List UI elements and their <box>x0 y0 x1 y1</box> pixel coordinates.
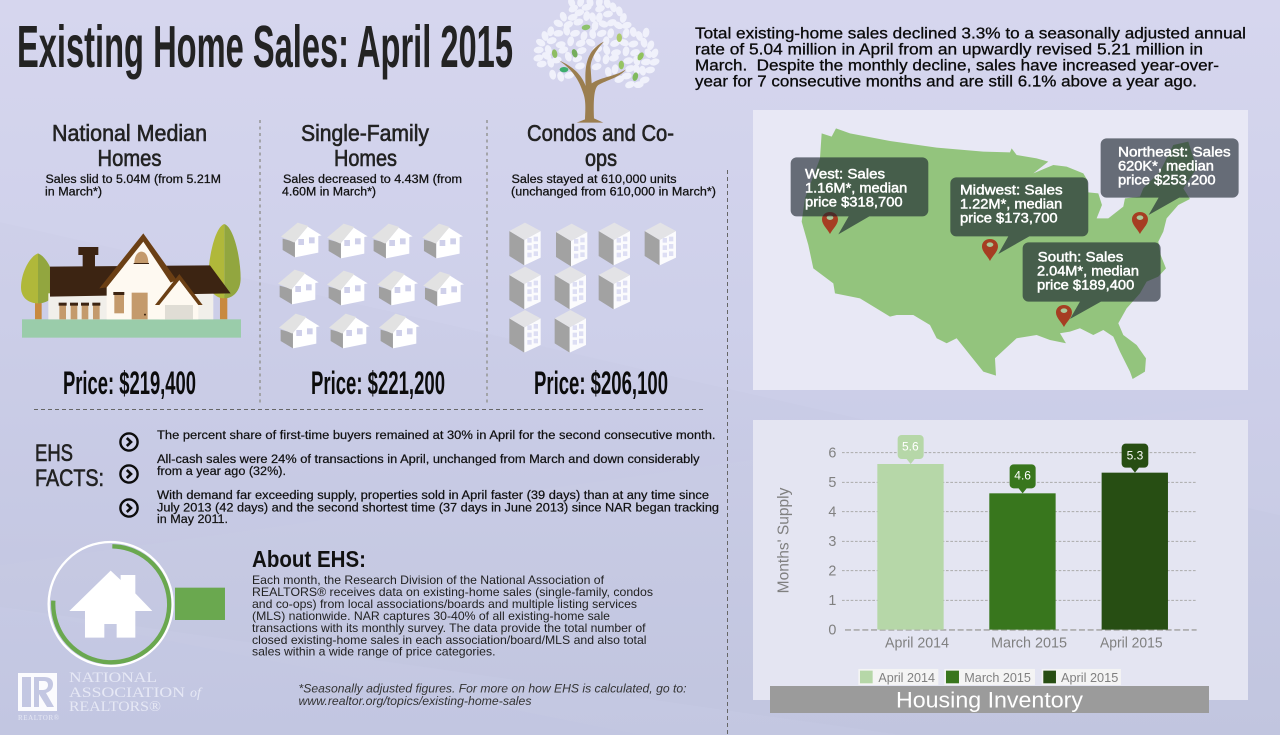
panel: housing inventory chart <box>753 420 1248 713</box>
bar: April 2014 <box>877 464 944 630</box>
intro paragraph: rate of 5.04 million in April from an upwardly revised 5.21 million in <box>695 42 1203 58</box>
icon: house illustration <box>21 224 241 338</box>
footnote <box>298 682 686 708</box>
panel: EHS facts <box>35 430 719 526</box>
pin: south <box>1056 305 1072 327</box>
icon: tree <box>533 0 660 123</box>
intro paragraph: March. Despite the monthly decline, sales have increased year-over- <box>695 58 1219 74</box>
icon: arrow bullet 2 <box>120 465 138 483</box>
callout: west <box>791 157 928 234</box>
title: Existing Home Sales: April 2015 <box>17 14 513 80</box>
x axis labels <box>885 636 1163 652</box>
label: 5.6 <box>898 435 924 464</box>
text: national sales: in March*) <box>45 186 102 198</box>
heading: condos and co-ops: Condos and Co- <box>527 120 674 146</box>
intro paragraph: year for 7 consecutive months and are still 6.1% above a year ago. <box>695 74 1197 90</box>
fact: demand and supply: With demand far exceeding supply, properties sold in April faster (39 days) than at any time since <box>157 490 709 502</box>
label: 4.6: 4.6 <box>1014 469 1031 483</box>
text: about EHS <box>252 574 653 658</box>
y axis labels: 3 <box>828 534 836 550</box>
heading: single-family homes: Single-Family <box>301 120 429 146</box>
chart title bar: housing inventory: Housing Inventory <box>896 688 1083 712</box>
text: single-family sales: 4.60M in March*) <box>282 186 376 198</box>
chart title bar: housing inventory <box>770 686 1209 713</box>
panel: national median homes <box>21 120 241 401</box>
bar: March 2015 <box>989 493 1056 630</box>
y axis labels: 2 <box>828 564 836 580</box>
heading: national median homes: National Median <box>52 120 207 146</box>
legend <box>858 669 1121 685</box>
heading: national median homes <box>52 120 207 171</box>
pin: west <box>822 212 838 234</box>
callout: west: West: Sales <box>805 166 885 181</box>
fact: all-cash sales: from a year ago (32%). <box>157 466 286 478</box>
callout: south: price $189,400 <box>1037 278 1135 293</box>
price: national: Price: $219,400 <box>63 365 196 401</box>
callout: midwest: price $173,700 <box>960 210 1058 225</box>
x axis labels: April 2015 <box>1100 636 1163 652</box>
icons: nine condo buildings <box>509 223 676 353</box>
heading: EHS facts <box>35 440 104 492</box>
tree trunk <box>559 42 626 123</box>
fact: first-time buyers: The percent share of first-time buyers remained at 30% in April for the second consecutive month. <box>157 430 716 442</box>
heading: condos and co-ops: ops <box>585 145 617 171</box>
x axis labels: March 2015 <box>991 636 1067 652</box>
heading: EHS facts: EHS <box>35 440 73 467</box>
icon: arrow bullet 3 <box>120 499 138 517</box>
text: about EHS: sales within a wide range of price categories. <box>252 646 496 658</box>
logo: national association of realtors <box>18 670 203 722</box>
callout: northeast <box>1101 138 1239 215</box>
green leaves <box>551 24 645 82</box>
legend: April 2014 <box>878 670 936 685</box>
x axis labels: April 2014 <box>885 636 949 652</box>
map: United States <box>802 128 1197 379</box>
text: single-family sales: Sales decreased to 4.43M (from <box>283 174 462 186</box>
icons: eleven houses <box>278 223 464 348</box>
label: 5.3: 5.3 <box>1127 449 1144 463</box>
callout: northeast: price $253,200 <box>1118 172 1216 187</box>
panel: condos and co-ops <box>509 120 716 401</box>
heading: national median homes: Homes <box>98 145 162 171</box>
bar: April 2015 <box>1102 473 1168 630</box>
callout: northeast: Northeast: Sales <box>1118 144 1231 159</box>
text: about EHS: REALTORS® receives data on existing-home sales (single-family, condos <box>252 586 653 599</box>
price: condos: Price: $206,100 <box>534 365 668 401</box>
icon: arrow bullet 1 <box>120 433 138 451</box>
text: single-family sales <box>282 174 462 198</box>
panel: about EHS <box>252 546 686 708</box>
fact: all-cash sales: All-cash sales were 24% of transactions in April, unchanged from March and down considerably <box>157 454 700 466</box>
price: single-family: Price: $221,200 <box>311 365 445 401</box>
logo: national association of realtors: REALTORS® <box>69 699 161 715</box>
callout: south: 2.04M*, median <box>1037 264 1139 279</box>
text: about EHS: transactions with its monthly survey. The data provide the total number of <box>252 622 646 635</box>
legend: April 2015 <box>1061 670 1118 685</box>
y axis title: Months' Supply <box>775 487 792 593</box>
logo: national association of realtors: REALTOR® <box>18 714 60 722</box>
callout: midwest: 1.22M*, median <box>960 196 1062 211</box>
callout: south: South: Sales <box>1038 250 1123 265</box>
callout: west: 1.16M*, median <box>805 181 907 196</box>
text: national sales: Sales slid to 5.04M (from 5.21M <box>46 174 221 186</box>
fact: demand and supply: July 2013 (42 days) and the second shortest time (37 days in June 2013) since NAR began tracking <box>157 502 719 514</box>
label: 5.6: 5.6 <box>902 440 919 454</box>
y axis labels: 0 <box>828 623 836 639</box>
footnote: *Seasonally adjusted figures. For more on how EHS is calculated, go to: <box>298 682 686 696</box>
y axis labels: 5 <box>828 475 836 491</box>
label: 5.3 <box>1122 444 1148 473</box>
heading: single-family homes <box>301 120 429 171</box>
heading: EHS facts: FACTS: <box>35 465 104 492</box>
label: 4.6 <box>1010 464 1036 493</box>
text: about EHS: Each month, the Research Division of the National Association of <box>252 574 605 587</box>
callout: midwest <box>950 177 1088 254</box>
heading: condos and co-ops <box>527 120 674 171</box>
text: about EHS: and co-ops) from local associations/boards and multiple listing services <box>252 598 637 611</box>
text: about EHS: (MLS) nationwide. NAR captures 30-40% of all existing-home sale <box>252 610 610 623</box>
logo: national association of realtors: NATIONAL <box>69 670 157 686</box>
footnote: www.realtor.org/topics/existing-home-sales <box>298 694 532 708</box>
heading: about EHS: About EHS: <box>252 546 366 572</box>
callout: south <box>1023 242 1161 319</box>
intro paragraph <box>695 26 1246 90</box>
callout: northeast: 620K*, median <box>1118 158 1214 173</box>
callout: west: price $318,700 <box>805 195 903 210</box>
logo: national association of realtors: of <box>190 686 203 701</box>
text: condo sales: (unchanged from 610,000 in March*) <box>511 186 716 198</box>
fact: demand and supply <box>157 490 719 526</box>
panel: US map <box>753 110 1248 390</box>
text: national sales <box>45 174 221 198</box>
y axis labels <box>828 446 836 639</box>
text: condo sales: Sales stayed at 610,000 units <box>512 174 677 186</box>
y axis labels: 1 <box>828 593 836 609</box>
callout: midwest: Midwest: Sales <box>960 182 1063 197</box>
panel: single-family homes <box>278 120 464 401</box>
text: condo sales <box>511 174 716 198</box>
fact: demand and supply: in May 2011. <box>157 514 228 526</box>
pin: midwest <box>982 239 998 261</box>
icon: house in circle <box>49 542 225 666</box>
pin: northeast <box>1132 212 1148 234</box>
text: about EHS: closed existing-home sales in each association/board/MLS and also total <box>252 634 646 647</box>
logo: national association of realtors: ASSOCIATION <box>69 685 186 701</box>
intro paragraph: Total existing-home sales declined 3.3% to a seasonally adjusted annual <box>695 26 1246 42</box>
y axis labels: 4 <box>828 505 836 521</box>
heading: single-family homes: Homes <box>334 145 397 171</box>
legend: March 2015 <box>964 670 1031 685</box>
fact: all-cash sales <box>157 454 700 478</box>
y axis labels: 6 <box>828 446 836 462</box>
